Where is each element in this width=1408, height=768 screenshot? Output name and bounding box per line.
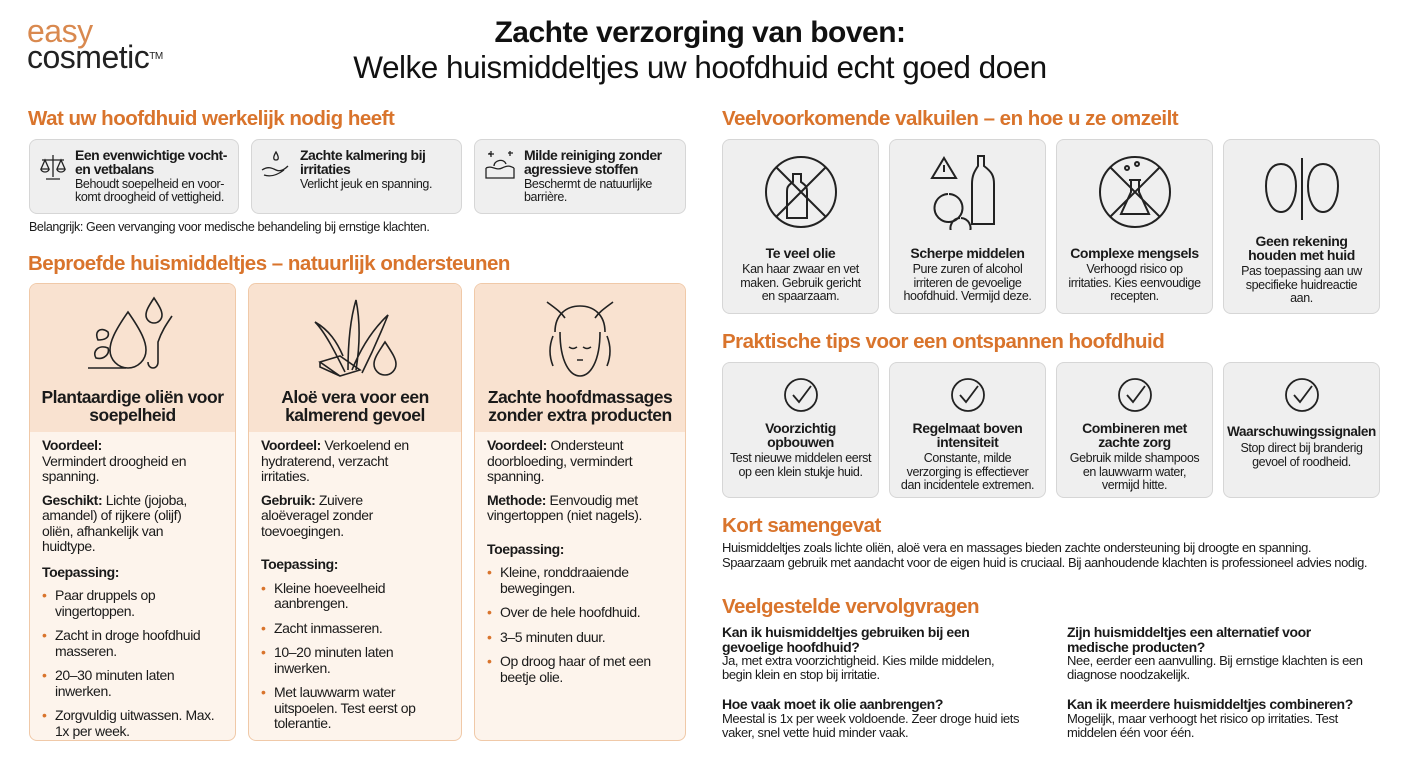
logo: easy — [27, 13, 93, 49]
panel: massage: Zachte hoofdmassages zonder extra producten — [488, 387, 672, 425]
faq 4 — [1067, 696, 1353, 740]
title: Welke huismiddeltjes uw hoofdhuid echt goed doen — [353, 49, 1047, 85]
card: sharp agents — [889, 139, 1046, 314]
faq 3 — [722, 696, 1019, 740]
heading: summary: Kort samengevat — [722, 514, 881, 537]
summary text: Huismiddeltjes zoals lichte oliën, aloë vera en massages bieden zachte ondersteuning bij droogte en spanning. — [722, 540, 1311, 555]
card: too much oil: Te veel olie — [766, 245, 835, 261]
card: balance: Behoudt soepelheid en voor-komt droogheid of vettigheid. — [75, 177, 224, 204]
heading: faq: Veelgestelde vervolgvragen — [722, 595, 979, 618]
needs cards — [29, 139, 686, 214]
card: sharp agents: Scherpe middelen — [910, 245, 1025, 261]
card: balance: en vetbalans — [75, 161, 154, 177]
faq 1 — [722, 624, 994, 682]
card: too much oil: Kan haar zwaar en vet maken. Gebruik gericht en spaarzaam. — [740, 262, 861, 303]
panel: oils: Toepassing: — [42, 564, 119, 580]
panel: aloe: Kleine hoeveelheid aanbrengen. — [274, 580, 385, 611]
panel: oils: Zacht in droge hoofdhuid masseren. — [55, 627, 200, 658]
panel: oils: Paar druppels op vingertoppen. — [55, 587, 155, 618]
card: sharp agents: Pure zuren of alcohol irriteren de gevoelige hoofdhuid. Vermijd deze. — [904, 262, 1032, 303]
card: cleansing — [474, 139, 686, 214]
panel: oils: Vermindert droogheid en spanning. — [42, 452, 186, 484]
panel: massage: Voordeel: Ondersteunt doorbloeding, vermindert spanning. — [487, 437, 632, 484]
panel: oils: Voordeel: — [42, 437, 102, 453]
tip 1 — [722, 362, 879, 498]
faq 1: Ja, met extra voorzichtigheid. Kies milde middelen, begin klein en stop bij irritatie. — [722, 653, 994, 682]
card: calming — [251, 139, 462, 214]
faq 2: Zijn huismiddeltjes een alternatief voor medische producten? — [1067, 624, 1311, 654]
faq 2 — [1067, 624, 1363, 682]
panel: massage: Kleine, ronddraaiende bewegingen. — [500, 564, 629, 596]
tip 4: Stop direct bij branderig gevoel of roodheid. — [1240, 441, 1363, 468]
card: balance — [29, 139, 239, 214]
panel: aloe: Aloë vera voor een kalmerend gevoel — [281, 387, 429, 425]
panel: oils: Geschikt: Lichte (jojoba, amandel) of rijkere (olijf) oliën, afhankelijk van huidtype. — [42, 492, 187, 554]
card: skin: Pas toepassing aan uw specifieke huidreactie aan. — [1241, 264, 1362, 305]
faq 4: Kan ik meerdere huismiddeltjes combineren? — [1067, 696, 1353, 712]
panel: aloe: Gebruik: Zuivere aloëveragel zonder toevoegingen. — [261, 492, 373, 538]
summary text — [722, 540, 1367, 570]
tip cards — [722, 362, 1380, 498]
pitfall cards — [722, 139, 1380, 314]
tip 1: Test nieuwe middelen eerst op een klein stukje huid. — [730, 451, 871, 478]
tip 3: Combineren met zachte zorg — [1082, 420, 1187, 450]
card: cleansing: Beschermt de natuurlijke barrière. — [524, 177, 652, 204]
panel: aloe: Zacht inmasseren. — [274, 620, 382, 636]
card: skin — [1223, 139, 1380, 314]
card: calming: Zachte kalmering bij irritaties — [300, 147, 425, 177]
faq — [722, 624, 1363, 740]
panel: aloe: Toepassing: — [261, 556, 338, 572]
card: skin: Geen rekening houden met huid — [1248, 233, 1355, 263]
faq 3: Hoe vaak moet ik olie aanbrengen? — [722, 696, 943, 712]
tip 3 — [1056, 362, 1213, 498]
faq 4: Mogelijk, maar verhoogt het risico op irritaties. Test middelen één voor één. — [1067, 710, 1338, 740]
note: Belangrijk: Geen vervanging voor medische behandeling bij ernstige klachten. — [29, 220, 429, 234]
card: balance: Een evenwichtige vocht- — [75, 147, 227, 163]
panel: aloe — [248, 283, 462, 741]
panel: oils: Plantaardige oliën voor soepelheid — [41, 387, 224, 425]
panel: aloe: Met lauwwarm water uitspoelen. Test eerst op tolerantie. — [274, 684, 416, 731]
heading: remedies: Beproefde huismiddeltjes – natuurlijk ondersteunen — [28, 252, 510, 275]
card: complex mixtures: Complexe mengsels — [1070, 245, 1199, 261]
card: complex mixtures: Verhoogd risico op irritaties. Kies eenvoudige recepten. — [1068, 262, 1201, 303]
panel: aloe: 10–20 minuten laten inwerken. — [274, 644, 393, 676]
panel: oils — [29, 283, 236, 741]
tip 2: Regelmaat boven intensiteit — [913, 420, 1022, 450]
panel: massage: Op droog haar of met een beetje olie. — [500, 653, 651, 684]
panel: massage — [474, 283, 686, 741]
tip 3: Gebruik milde shampoos en lauwwarm water, vermijd hitte. — [1070, 451, 1199, 492]
panel: aloe: Voordeel: Verkoelend en hydraterend, verzacht irritaties. — [261, 437, 409, 484]
faq 2: Nee, eerder een aanvulling. Bij ernstige klachten is een diagnose noodzakelijk. — [1067, 653, 1363, 682]
panel: massage: Over de hele hoofdhuid. — [500, 604, 640, 620]
tip 4: Waarschuwingssignalen — [1227, 424, 1376, 439]
panel: oils: 20–30 minuten laten inwerken. — [55, 667, 174, 698]
card: complex mixtures — [1056, 139, 1213, 314]
tip 4 — [1223, 362, 1380, 498]
tip 1: Voorzichtig opbouwen — [765, 420, 836, 450]
card: too much oil — [722, 139, 879, 314]
logo: cosmeticTM — [27, 39, 163, 75]
panel: massage: Methode: Eenvoudig met vingertoppen (niet nagels). — [487, 492, 642, 523]
tip 2: Constante, milde verzorging is effectiever dan incidentele extremen. — [901, 451, 1034, 492]
panel: massage: 3–5 minuten duur. — [500, 628, 605, 644]
card: cleansing: Milde reiniging zonder agressieve stoffen — [524, 147, 662, 177]
title: Zachte verzorging van boven: — [494, 16, 906, 49]
title — [353, 16, 1047, 85]
card: calming: Verlicht jeuk en spanning. — [300, 177, 432, 191]
panel: massage: Toepassing: — [487, 540, 564, 556]
faq 1: Kan ik huismiddeltjes gebruiken bij een gevoelige hoofdhuid? — [722, 624, 969, 654]
logo — [27, 13, 163, 75]
panel: oils: Zorgvuldig uitwassen. Max. 1x per week. — [55, 707, 214, 738]
faq 3: Meestal is 1x per week voldoende. Zeer droge huid iets vaker, snel vette huid minder vaak. — [722, 710, 1019, 740]
heading: pitfalls: Veelvoorkomende valkuilen – en hoe u ze omzeilt — [722, 107, 1178, 130]
heading: needs: Wat uw hoofdhuid werkelijk nodig heeft — [28, 107, 394, 130]
tip 2 — [889, 362, 1046, 498]
summary text: Spaarzaam gebruik met aandacht voor de eigen huid is cruciaal. Bij aanhoudende klachten is professioneel advies nodig. — [722, 554, 1367, 570]
heading: tips: Praktische tips voor een ontspannen hoofdhuid — [722, 330, 1164, 353]
